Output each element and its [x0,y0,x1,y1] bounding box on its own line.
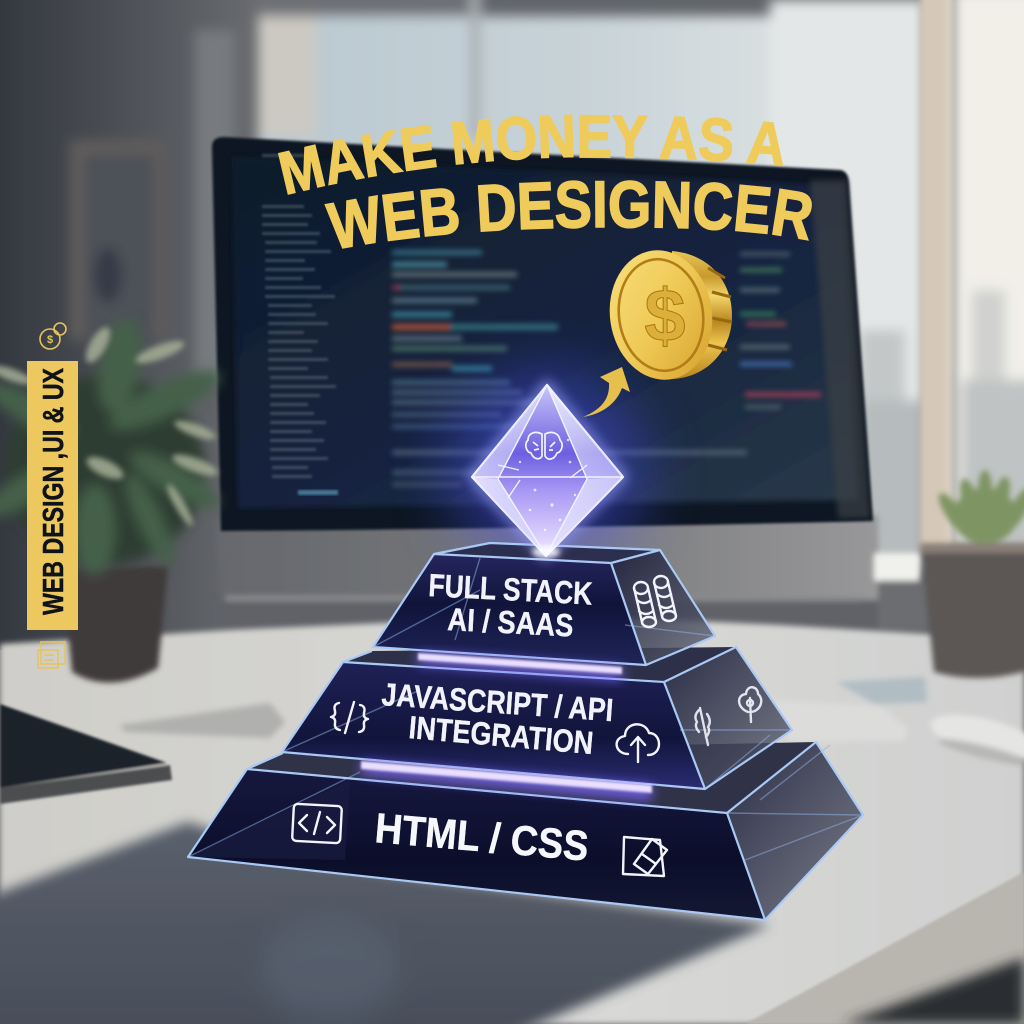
bottom pyramid tier [188,742,863,920]
label: Integration: INTEGRATION [407,709,595,761]
icon: curly code [331,702,368,733]
icon: coins [40,323,66,349]
desk surface [0,615,1024,1024]
right plant [920,470,1024,678]
glowing light bars [361,653,652,800]
notebook [0,704,172,804]
soft diamond glow [447,370,647,570]
label: AI / SaaS: AI / SAAS [447,601,574,644]
side label banner [27,361,78,630]
label: HTML / CSS: HTML / CSS [373,804,590,870]
middle pyramid tier [282,647,792,789]
left plant [0,314,226,683]
monitor [212,137,873,531]
coin: $ [644,274,686,357]
icon: coins: $ [47,334,53,346]
icon: cloud upload [617,724,659,762]
arrow to coin [583,367,630,417]
icon: brain [526,432,562,459]
monitor lower body [215,515,928,630]
desk front edge and dark floor [745,872,1024,1024]
icon: price card [38,642,65,668]
title [278,114,812,268]
right window [953,0,1024,550]
icon: database stacks [634,576,676,627]
icon: side cloud [739,687,761,722]
icon: code window [292,804,342,843]
side label banner: WEB DESIGN ,UI & UX [38,367,70,615]
top pyramid tier [373,543,715,665]
code lines [262,154,821,495]
keyboard and small desk objects [120,677,1024,769]
wall stripe and picture frame [70,30,235,380]
icon: eraser pad [623,837,667,876]
crystal diamond [472,385,623,558]
window pillar [920,0,953,550]
desk shadow [0,822,770,1024]
label: JavaScript / API: JAVASCRIPT / API [381,676,614,728]
title line 1: MAKE MONEY AS A [278,114,784,195]
wall [0,0,270,650]
title line 2: WEB DESIGNCER [324,180,812,249]
window [258,0,925,570]
label: Full Stack: FULL STACK [428,567,593,612]
coin [601,244,732,386]
icon: side code [695,708,710,745]
